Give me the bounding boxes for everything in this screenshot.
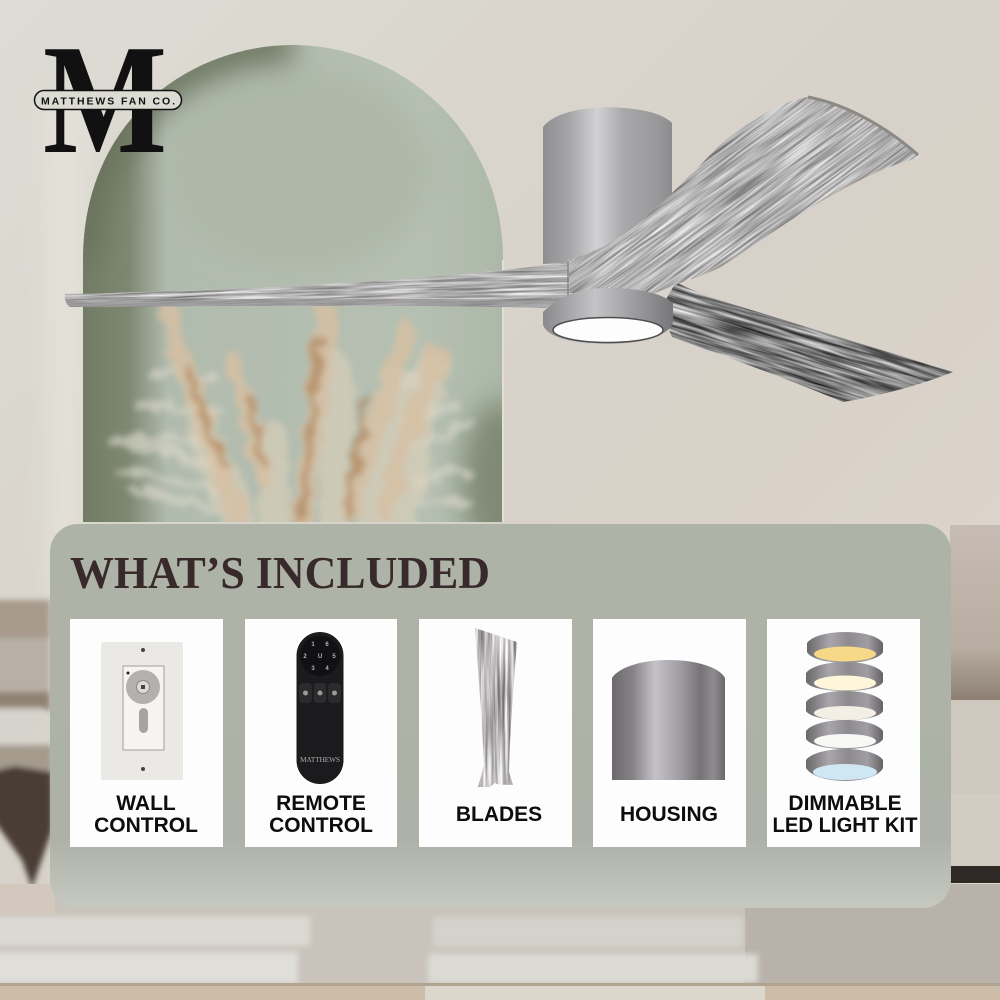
icon: remote: 1: [311, 642, 315, 648]
card: led light kit: [767, 619, 920, 847]
fan: upper right blade: [568, 97, 918, 294]
fan: lower blade: [666, 284, 953, 402]
label: CONTROL: [269, 814, 373, 837]
fan: [49, 0, 1000, 522]
background: sofa and cushions at left: [0, 600, 52, 888]
icon: blade: [475, 628, 517, 787]
icon: five light discs: [806, 632, 883, 781]
icon: remote: 6: [325, 642, 329, 648]
fan: blade tip edge: [808, 97, 918, 155]
icon: remote: 3: [311, 666, 315, 672]
label: WALL: [116, 792, 176, 815]
fan: light ring: [543, 288, 673, 344]
logo: [34, 12, 182, 186]
card: blades: [419, 619, 572, 847]
logo: name pill: [34, 90, 182, 110]
icon: remote: MATTHEWS: [300, 755, 340, 764]
background: pampas grass: [118, 312, 470, 522]
panel: what's included: [50, 524, 951, 908]
card: wall control: [70, 619, 223, 847]
icon: remote: 5: [332, 654, 336, 660]
label: CONTROL: [94, 814, 198, 837]
background: floor with light patches: [0, 884, 1000, 1000]
background: arched niche: [83, 45, 504, 522]
icon: wall plate: [101, 642, 183, 780]
fan: long left blade: [64, 262, 573, 308]
label: BLADES: [456, 803, 542, 826]
icon: remote: 4: [325, 666, 329, 672]
label: LED LIGHT KIT: [772, 814, 918, 837]
icon: housing cylinder: [612, 660, 725, 780]
logo: serif M: M: [43, 12, 167, 186]
background: sofa at right: [950, 525, 1000, 883]
card: housing: [593, 619, 746, 847]
label: REMOTE: [276, 792, 366, 815]
icon: remote: 2: [303, 654, 307, 660]
fan: led light: [553, 318, 663, 342]
fan: motor housing: [543, 107, 672, 264]
label: HOUSING: [620, 803, 718, 826]
logo: company name: MATTHEWS FAN CO.: [41, 96, 175, 108]
icon: remote: [296, 632, 344, 784]
icon: remote: U: [318, 654, 322, 660]
heading: WHAT’S INCLUDED: [70, 547, 490, 598]
card: remote control: [245, 619, 397, 847]
label: DIMMABLE: [788, 792, 902, 815]
fan: blade seam: [567, 262, 569, 298]
